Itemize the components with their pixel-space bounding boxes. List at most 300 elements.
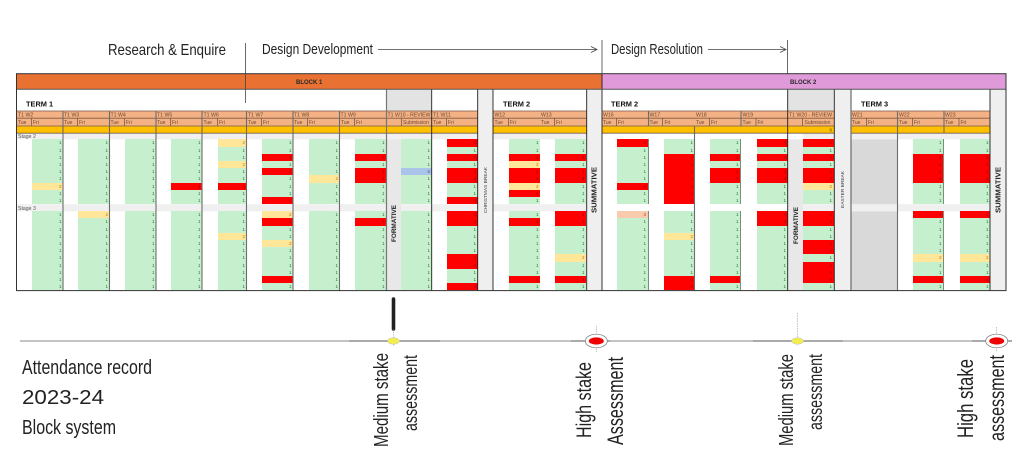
column W17: 2: [690, 234, 693, 239]
stage 3 band: term 1: [17, 204, 478, 211]
column W8: 1: [335, 184, 338, 189]
column W3: 1: [105, 169, 108, 174]
column W23: 4: [986, 176, 988, 181]
column W22: 1: [939, 248, 942, 253]
column W3: 1: [105, 162, 108, 167]
amber strip: term 2 first part: [493, 126, 587, 133]
column W7: 4: [289, 198, 292, 203]
week labels: W19: [742, 113, 753, 119]
amber strip: term 1: [17, 126, 478, 133]
stage 3 band: term 2 first part: [493, 204, 587, 211]
column W2: 1: [59, 234, 62, 239]
column W2: 1: [59, 241, 62, 246]
column W13: 1: [582, 191, 584, 196]
week header band: term 2 second part: [602, 111, 834, 126]
column W16: 1: [643, 191, 646, 196]
column W12: 1: [536, 227, 538, 232]
column W18: 4: [736, 176, 738, 181]
column W11: 4: [473, 263, 476, 268]
column W12: 4: [536, 277, 538, 282]
column W12: 1: [536, 248, 538, 253]
column W5: [171, 139, 202, 290]
column W4: 1: [152, 198, 154, 203]
column W17: [664, 139, 694, 290]
column W8: 1: [335, 155, 338, 160]
column W23: 4: [986, 155, 988, 160]
column W2: 1: [59, 255, 62, 260]
review header block W10: [387, 89, 432, 111]
arrow: design resolution: [708, 46, 786, 52]
column W18: 1: [736, 255, 738, 260]
column W4: 1: [152, 184, 154, 189]
column W4: 1: [152, 219, 154, 224]
column W12: 1: [536, 212, 538, 217]
day labels: Tue: [433, 120, 442, 126]
column W13: 1: [582, 234, 584, 239]
column W18: 4: [736, 169, 738, 174]
column W4: [125, 139, 156, 290]
day labels: Tue: [650, 120, 658, 126]
column W11: 4: [473, 140, 476, 145]
column W9: 1: [382, 270, 384, 275]
column W3: 1: [105, 248, 108, 253]
column W23: 4: [986, 169, 988, 174]
column W20 submission: 4: [829, 277, 832, 282]
column W4: 1: [152, 227, 154, 232]
column W20 submission: 4: [829, 169, 832, 174]
column W20 submission: 2: [829, 184, 832, 189]
column W23: 1: [986, 270, 988, 275]
column W2: 1: [59, 219, 62, 224]
day labels: Submission: [804, 120, 831, 126]
formative column W20: [788, 139, 803, 290]
column W20 submission: 4: [829, 263, 832, 268]
column W5: 1: [198, 176, 200, 181]
column W20 submission: 1: [829, 284, 832, 289]
column W23: 4: [986, 277, 988, 282]
column W16: 1: [643, 155, 646, 160]
column W23: 1: [986, 241, 988, 246]
W21 closed block stage 2: [852, 139, 898, 204]
column W13: 1: [582, 263, 584, 268]
column W3: 1: [105, 140, 108, 145]
week labels: W12: [494, 113, 505, 119]
day labels: Fri: [664, 120, 670, 126]
column W7: 1: [289, 270, 292, 275]
week labels: T1 W3: [64, 113, 79, 119]
stage 3 band: term 3: [851, 204, 990, 211]
column W2: 1: [59, 162, 62, 167]
day labels: Fri: [356, 120, 362, 126]
column W6: 1: [242, 248, 245, 253]
column W6: 1: [242, 255, 245, 260]
column W20 submission: 4: [829, 248, 832, 253]
week labels: W22: [899, 113, 910, 119]
column W3: 1: [105, 277, 108, 282]
column W5: 1: [198, 140, 200, 145]
column W10 submission: [401, 139, 432, 290]
day labels: Fri: [868, 120, 874, 126]
column W7: 1: [289, 263, 292, 268]
column W23: [960, 139, 990, 290]
column W8: 1: [335, 227, 338, 232]
column W10 submission: 1: [427, 162, 430, 167]
week labels: T1 W20 - REVIEW: [789, 113, 832, 119]
column W13: 1: [582, 270, 584, 275]
column W12: 1: [536, 284, 538, 289]
column W6: 1: [242, 219, 245, 224]
stage 2 band: term 3: [851, 133, 990, 139]
column W9: 1: [382, 184, 384, 189]
column W16: 1: [643, 219, 646, 224]
column W6: 4: [242, 184, 245, 189]
column W8: 1: [335, 140, 338, 145]
column W17: 1: [690, 241, 693, 246]
column W17: 4: [690, 184, 693, 189]
caption: attendance record: Attendance record: [22, 357, 152, 379]
column W5: 1: [198, 284, 200, 289]
column W6: 2: [242, 162, 245, 167]
column W7: 4: [289, 219, 292, 224]
column W5: 1: [198, 255, 200, 260]
label: medium stake 1: Medium stake: [371, 353, 393, 447]
phase divider at block boundary: [601, 40, 603, 74]
column W9: 1: [382, 255, 384, 260]
column W20 submission: 1: [829, 198, 832, 203]
column W11: 4: [473, 169, 476, 174]
column W22: 1: [939, 148, 942, 153]
W21 closed block stage 3: [852, 211, 898, 290]
day labels: Fri: [263, 120, 269, 126]
block 2 label: BLOCK 2: [790, 80, 817, 86]
column W2: 1: [59, 176, 62, 181]
column W22: 1: [939, 270, 942, 275]
column W18: 1: [736, 234, 738, 239]
column W5: 1: [198, 277, 200, 282]
day labels: Tue: [899, 120, 908, 126]
day labels: Tue: [852, 120, 861, 126]
column W12: 1: [536, 263, 538, 268]
column W18: 1: [736, 263, 738, 268]
day labels: Tue: [696, 120, 705, 126]
stage 2 band: term 2 first part: [493, 133, 587, 139]
column W16: 1: [643, 148, 646, 153]
column W11: 4: [473, 198, 476, 203]
column W16: [617, 139, 649, 290]
column W11: 1: [473, 191, 476, 196]
column W22: 1: [939, 284, 942, 289]
column W7: 4: [289, 169, 292, 174]
phase divider line: [244, 43, 246, 103]
column W18: 1: [736, 227, 738, 232]
week labels: T1 W8: [294, 113, 309, 119]
week labels: T1 W11: [433, 113, 451, 119]
column W18: 1: [736, 148, 738, 153]
week labels: T1 W9: [340, 113, 356, 119]
column W22: 1: [939, 198, 942, 203]
column W4: 1: [152, 284, 154, 289]
column W12: 1: [536, 148, 538, 153]
column W18: 1: [736, 284, 738, 289]
column W6: 1: [242, 227, 245, 232]
column W20 submission: 4: [829, 219, 832, 224]
column W13: 4: [582, 155, 584, 160]
column W6: 1: [242, 191, 245, 196]
column W12: 1: [536, 140, 538, 145]
day labels: Tue: [18, 120, 27, 126]
column W11: 4: [473, 176, 476, 181]
column W19: 4: [783, 169, 786, 174]
column W23: 4: [986, 162, 988, 167]
term 3 heading: TERM 3: [861, 100, 888, 109]
column W5: 1: [198, 248, 200, 253]
column W5: 1: [198, 263, 200, 268]
column W23: 1: [986, 191, 988, 196]
column W22: 4: [939, 176, 942, 181]
column W23: 1: [986, 284, 988, 289]
week labels: W16: [603, 113, 614, 119]
column W17: 1: [690, 148, 693, 153]
column W11: 1: [473, 277, 476, 282]
column W13: 1: [582, 241, 584, 246]
column W11: 1: [473, 162, 476, 167]
week header band: term 2 first part: [493, 111, 587, 126]
column W22: 4: [939, 212, 942, 217]
column W4: 1: [152, 241, 154, 246]
summative label 1: SUMMATIVE: [590, 167, 599, 213]
day labels: Fri: [309, 120, 315, 126]
column W10 submission: 1: [427, 212, 430, 217]
column W11: 1: [473, 148, 476, 153]
column W16: 1: [643, 176, 646, 181]
column W8: 1: [335, 234, 338, 239]
column W16: 4: [643, 184, 646, 189]
column W13: 1: [582, 148, 584, 153]
column W3: 1: [105, 198, 108, 203]
stage 2 band: term 1: [17, 133, 478, 139]
column W22: 4: [939, 277, 942, 282]
column W13: 1: [582, 227, 584, 232]
column W13: [555, 139, 586, 290]
day labels: Tue: [341, 120, 350, 126]
column W11: 1: [473, 184, 476, 189]
day labels: Tue: [945, 120, 954, 126]
column W10 submission: 1: [427, 277, 430, 282]
column W3: 1: [105, 148, 108, 153]
column W18: 4: [736, 277, 738, 282]
amber strip value: 9: [829, 128, 832, 134]
column W18: 1: [736, 184, 738, 189]
day labels: Fri: [618, 120, 624, 126]
column W18: 1: [736, 219, 738, 224]
column W8: 1: [335, 162, 338, 167]
column W9: 1: [382, 248, 384, 253]
column W17: 1: [690, 212, 693, 217]
week labels: T1 W10 - REVIEW: [388, 113, 431, 119]
column W16: 1: [643, 198, 646, 203]
column W12: 1: [536, 234, 538, 239]
marker: medium stake 2: [792, 313, 804, 346]
column W9: [355, 139, 386, 290]
column W22: 1: [939, 227, 942, 232]
column W3: 1: [105, 234, 108, 239]
column W8: 1: [335, 263, 338, 268]
day labels: Fri: [33, 120, 39, 126]
column W19: [757, 139, 788, 290]
column W18: 1: [736, 191, 738, 196]
column W16: 1: [643, 255, 646, 260]
column W18: 1: [736, 270, 738, 275]
easter break column: [835, 89, 851, 290]
column W3: 1: [105, 219, 108, 224]
day labels: Tue: [157, 120, 166, 126]
christmas break label: CHRISTMAS BREAK: [483, 166, 489, 213]
column W23: 1: [986, 140, 988, 145]
week header band: term 3: [851, 111, 990, 126]
column W11: 4: [473, 212, 476, 217]
column W20 submission: 4: [829, 212, 832, 217]
column W17: 1: [690, 219, 693, 224]
column W16: 1: [643, 284, 646, 289]
column W17: 4: [690, 284, 693, 289]
column W5: 1: [198, 270, 200, 275]
column W19: 1: [783, 270, 786, 275]
column W9: 4: [382, 219, 384, 224]
column W17: 1: [690, 270, 693, 275]
block 1 bar: [17, 74, 602, 89]
column W19: 1: [783, 184, 786, 189]
week header band: term 1: [17, 111, 478, 126]
column W12: 4: [536, 191, 538, 196]
column W22: 1: [939, 234, 942, 239]
column W17: 1: [690, 255, 693, 260]
column W22: 1: [939, 140, 942, 145]
column W19: 4: [783, 155, 786, 160]
column W5: 4: [198, 184, 200, 189]
column W5: 1: [198, 198, 200, 203]
column W9: 1: [382, 140, 384, 145]
column W8: 1: [335, 277, 338, 282]
column W3: 1: [105, 263, 108, 268]
column W10 submission: 1: [427, 255, 430, 260]
column W23: 1: [986, 248, 988, 253]
stage 3 band: W20: [803, 204, 834, 211]
column W8: 1: [335, 270, 338, 275]
column W10 submission: 1: [427, 140, 430, 145]
column W7: 2: [289, 212, 292, 217]
arrow: design development: [378, 46, 597, 52]
column W4: 1: [152, 248, 154, 253]
column W3: 1: [105, 176, 108, 181]
column W17: 4: [690, 176, 693, 181]
column W7: 1: [289, 191, 292, 196]
formative label W20: FORMATIVE: [793, 206, 800, 244]
column W2: 2: [59, 184, 62, 189]
column W3: 1: [105, 227, 108, 232]
column W4: 1: [152, 191, 154, 196]
column W16: 4: [643, 140, 646, 145]
column W22: 4: [939, 169, 942, 174]
column W7: 1: [289, 284, 292, 289]
day labels: Fri: [556, 120, 562, 126]
column W10 submission: 1: [427, 191, 430, 196]
column W7: 1: [289, 162, 292, 167]
column W20 submission: 1: [829, 191, 832, 196]
column W13: 4: [582, 212, 584, 217]
column W23: 1: [986, 263, 988, 268]
column W17: 1: [690, 140, 693, 145]
day labels: Fri: [448, 120, 454, 126]
column W5: 1: [198, 191, 200, 196]
week labels: W23: [945, 113, 956, 119]
summative column 1: [587, 89, 602, 290]
formative label W10: FORMATIVE: [391, 204, 398, 242]
column W10 submission: 1: [427, 241, 430, 246]
column W9: 4: [382, 169, 384, 174]
week labels: T1 W2: [18, 113, 33, 119]
column W6: 1: [242, 284, 245, 289]
column W13: 1: [582, 284, 584, 289]
column W2: 1: [59, 140, 62, 145]
column W2: 1: [59, 248, 62, 253]
easter break label: EASTER BREAK: [840, 170, 846, 208]
column W18: 1: [736, 140, 738, 145]
column W5: 1: [198, 227, 200, 232]
stage 2 label: Stage 2: [18, 134, 36, 140]
column W7: 1: [289, 140, 292, 145]
column W16: 1: [643, 162, 646, 167]
column W10 submission: 1: [427, 184, 430, 189]
column W12: 1: [536, 255, 538, 260]
column W10 submission: 1: [427, 248, 430, 253]
column W19: 1: [783, 255, 786, 260]
column W20 submission: 4: [829, 241, 832, 246]
day labels: Fri: [960, 120, 966, 126]
block 2 bar: [602, 74, 1006, 89]
column W13: 4: [582, 277, 584, 282]
column W22: 1: [939, 263, 942, 268]
column W19: 1: [783, 263, 786, 268]
column W20 submission: 4: [829, 155, 832, 160]
column W10 submission: 1: [427, 219, 430, 224]
column W19: 1: [783, 234, 786, 239]
column W5: 1: [198, 241, 200, 246]
column W13: 1: [582, 248, 584, 253]
column W19: 1: [783, 248, 786, 253]
column W11: 4: [473, 219, 476, 224]
phase heading: design resolution: Design Resolution: [611, 41, 703, 58]
column W11: 1: [473, 227, 476, 232]
column W17: 1: [690, 227, 693, 232]
column W9: 1: [382, 148, 384, 153]
column W11: 1: [473, 248, 476, 253]
column W9: 1: [382, 263, 384, 268]
column W4: 1: [152, 155, 154, 160]
column W10 submission: 1: [427, 155, 430, 160]
column W18: 1: [736, 198, 738, 203]
column W12: 4: [536, 176, 538, 181]
column W20 submission: 4: [829, 140, 832, 145]
column W11: 4: [473, 255, 476, 260]
column W12: 1: [536, 241, 538, 246]
column W9: 1: [382, 191, 384, 196]
column W4: 1: [152, 169, 154, 174]
column W16: 1: [643, 248, 646, 253]
column W8: 1: [335, 241, 338, 246]
column W10 submission: 1: [427, 284, 430, 289]
column W8: [309, 139, 339, 290]
column W6: 1: [242, 241, 245, 246]
